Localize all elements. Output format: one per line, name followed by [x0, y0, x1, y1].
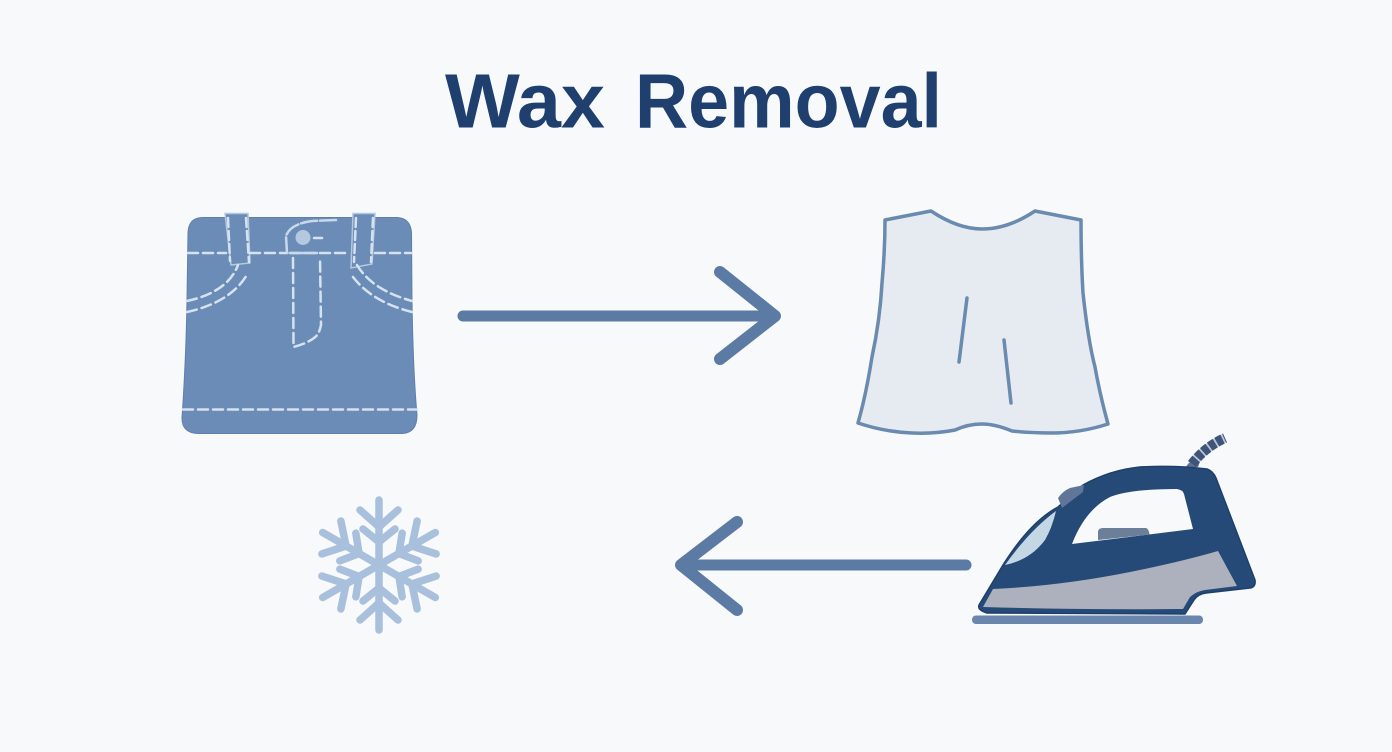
icon: jeans: [182, 214, 417, 434]
jeans body: [182, 218, 417, 434]
jeans button tab: [286, 220, 336, 253]
arrow: right: [463, 272, 775, 359]
icon: iron: [972, 438, 1255, 624]
jeans belt loops: [225, 214, 375, 268]
iron steam button: [1058, 485, 1084, 508]
iron body: [979, 466, 1255, 614]
icon: cloth: [858, 211, 1108, 433]
cloth creases: [959, 298, 1011, 403]
cloth sheet: [858, 211, 1108, 433]
iron handle opening: [1072, 489, 1193, 544]
jeans button: [296, 230, 310, 245]
arrow: left: [681, 522, 966, 610]
iron knob: [1098, 528, 1150, 540]
iron water tank: [1005, 511, 1056, 565]
icon: snowflake: [313, 500, 445, 630]
iron cord: [1186, 438, 1225, 467]
jeans stitching: [183, 218, 417, 410]
iron base bar: [972, 616, 1203, 624]
title: Wax: [445, 58, 605, 144]
iron soleplate: [983, 551, 1237, 609]
title: Removal: [635, 58, 942, 144]
